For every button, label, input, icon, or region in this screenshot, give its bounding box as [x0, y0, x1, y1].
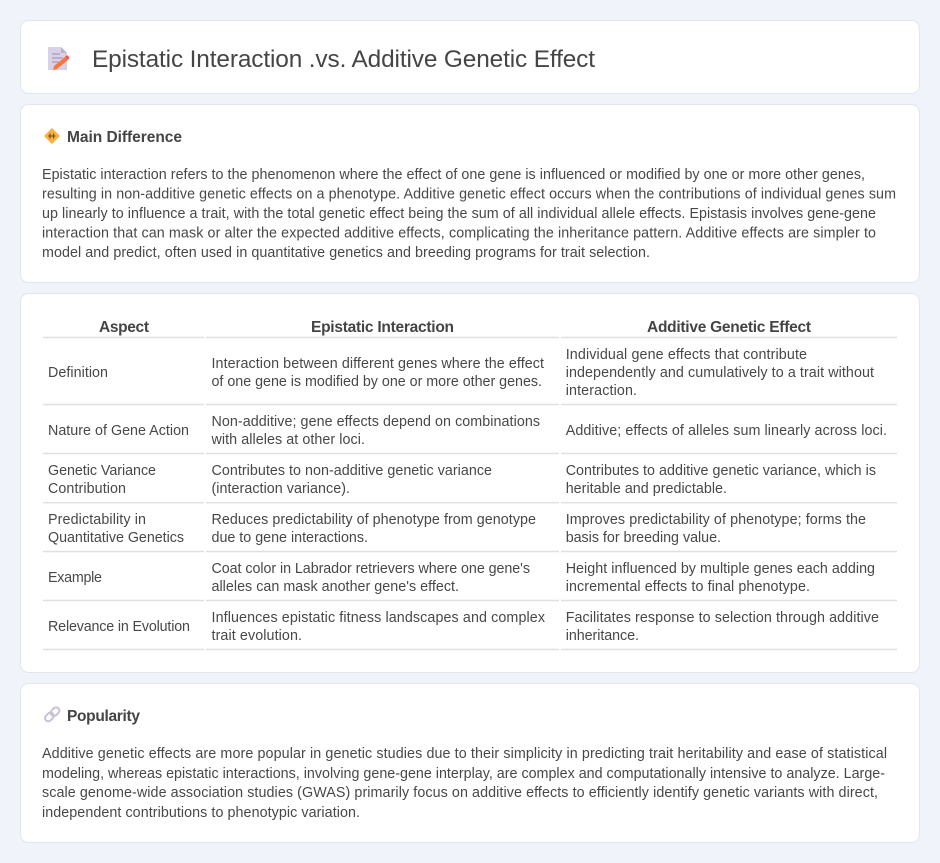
table header row: Aspect [99, 319, 149, 336]
row: nature of gene action: with alleles at other loci. [210, 432, 365, 448]
row: nature of gene action [43, 414, 897, 454]
row: relevance in evolution: inheritance. [566, 628, 639, 644]
row: predictability: due to gene interactions. [212, 530, 368, 546]
text block: popularity: scale genome-wide association studies (GWAS) primarily focus on additive effects to efficiently identify genetic variants with direct, [42, 785, 878, 801]
icon: document with pencil [48, 47, 70, 70]
row: relevance in evolution: trait evolution. [212, 628, 302, 644]
row: predictability: Predictability in [48, 512, 146, 528]
row: predictability: Improves predictability of phenotype; forms the [566, 512, 866, 528]
row: example: Height influenced by multiple genes each adding [566, 561, 875, 577]
row: nature of gene action: Non-additive; gene effects depend on combinations [212, 414, 540, 430]
row: definition: interaction. [566, 383, 637, 399]
icon: warning diamond [44, 128, 60, 144]
heading: popularity: Popularity [67, 708, 140, 725]
row: example: Example [48, 570, 102, 586]
title: Epistatic Interaction .vs. Additive Genetic Effect [92, 46, 595, 73]
text block: popularity [42, 746, 887, 821]
row: nature of gene action: Nature of Gene Action [48, 423, 189, 439]
table header row: Additive Genetic Effect [647, 319, 811, 336]
row: relevance in evolution: Relevance in Evolution [48, 619, 190, 635]
row: genetic variance contribution [43, 463, 897, 503]
row: genetic variance contribution: (interaction variance). [212, 481, 350, 497]
text block: popularity: independent contributions to phenotypic variation. [42, 805, 360, 821]
row: predictability: Reduces predictability of phenotype from genotype [212, 512, 536, 528]
row: nature of gene action: Additive; effects of alleles sum linearly across loci. [566, 423, 887, 439]
table header row: Epistatic Interaction [311, 319, 454, 336]
row: definition: of one gene is modified by one or more other genes. [212, 374, 542, 390]
row: definition: Individual gene effects that contribute [566, 347, 807, 363]
row: genetic variance contribution: Genetic Variance [48, 463, 156, 479]
text block: main difference: resulting in non-additive genetic effects on a phenotype. Additive genetic effect occurs when the contributions of individual genes sum [42, 186, 896, 202]
row: relevance in evolution [43, 610, 897, 650]
panel: popularity [20, 684, 920, 842]
row: relevance in evolution: Influences epistatic fitness landscapes and complex [212, 610, 545, 626]
text block: main difference: interaction that can mask or alter the expected additive effects, complicating the inheritance pattern. Additive effects are simpler to [42, 226, 876, 242]
row: predictability: Quantitative Genetics [48, 530, 184, 546]
icon: chain link [44, 706, 61, 723]
text block: main difference: up linearly to influence a trait, with the total genetic effect being the sum of all individual allele effects. Epistasis involves gene-gene [42, 206, 876, 222]
text block: popularity: modeling, whereas epistatic interactions, involving gene-gene interplay, are complex and computationally intensive to analyze. Large- [42, 766, 885, 782]
row: example [43, 561, 897, 600]
row: definition: Interaction between different genes where the effect [212, 356, 544, 372]
text block: main difference: Epistatic interaction refers to the phenomenon where the effect of one gene is influenced or modified by one or more other genes, [42, 167, 865, 183]
panel: header [20, 20, 920, 94]
row: definition: Definition [48, 365, 108, 381]
heading: main difference: Main Difference [67, 129, 182, 146]
row: example: incremental effects to final phenotype. [566, 579, 810, 595]
text block: main difference: model and predict, often used in quantitative genetics and breeding programs for trait selection. [42, 245, 650, 261]
row: relevance in evolution: Facilitates response to selection through additive [566, 610, 879, 626]
row: genetic variance contribution: Contributes to additive genetic variance, which is [566, 463, 876, 479]
text block: popularity: Additive genetic effects are more popular in genetic studies due to their simplicity in predicting trait heritability and ease of statistical [42, 746, 887, 762]
panel: comparison table [20, 294, 920, 672]
row: example: alleles can mask another gene's effect. [212, 579, 459, 595]
row: example: Coat color in Labrador retrievers where one gene's [212, 561, 530, 577]
row: definition [43, 347, 897, 404]
row: predictability: basis for breeding value. [566, 530, 721, 546]
row: definition: independently and cumulatively to a trait without [566, 365, 874, 381]
panel: main difference [20, 104, 920, 282]
table header row [43, 319, 897, 338]
row: genetic variance contribution: Contributes to non-additive genetic variance [212, 463, 492, 479]
text block: main difference [42, 167, 896, 261]
row: genetic variance contribution: heritable and predictable. [566, 481, 727, 497]
row: genetic variance contribution: Contribution [48, 481, 126, 497]
row: predictability [43, 512, 897, 552]
